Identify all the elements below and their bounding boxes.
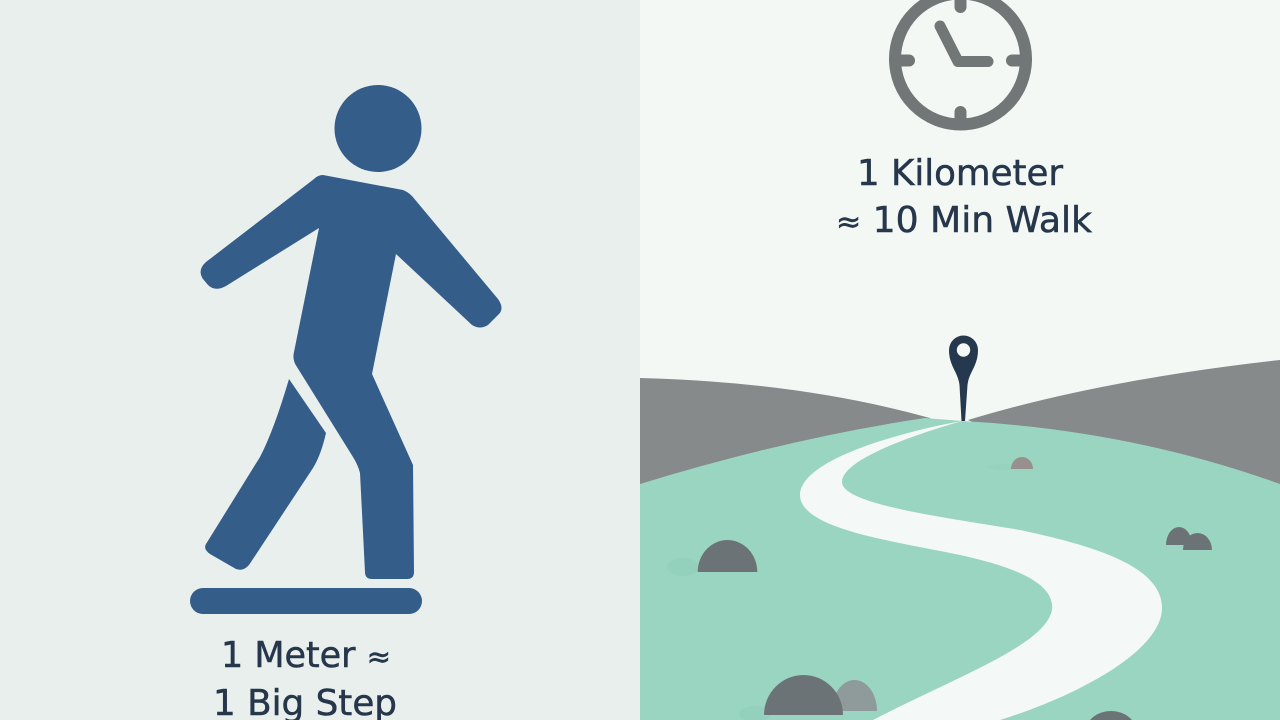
hills: gray bbox=[640, 360, 1280, 490]
icon: clock bbox=[895, 0, 1026, 124]
rocks bbox=[667, 457, 1212, 720]
icon: walking person bbox=[190, 85, 502, 614]
panel: left 1 meter bbox=[0, 0, 640, 720]
label: 1 kilometer: ≈ 10 Min Walk bbox=[836, 200, 1092, 241]
label: 1 meter bbox=[213, 635, 397, 720]
path: winding white road bbox=[800, 421, 1162, 720]
icon: location pin bbox=[949, 336, 978, 421]
label: 1 kilometer bbox=[836, 153, 1092, 241]
ground: green field bbox=[640, 418, 1280, 720]
panel: right 1 kilometer bbox=[640, 0, 1280, 720]
label: 1 meter: 1 Meter ≈ bbox=[221, 635, 391, 676]
label: 1 kilometer: 1 Kilometer bbox=[857, 153, 1063, 194]
